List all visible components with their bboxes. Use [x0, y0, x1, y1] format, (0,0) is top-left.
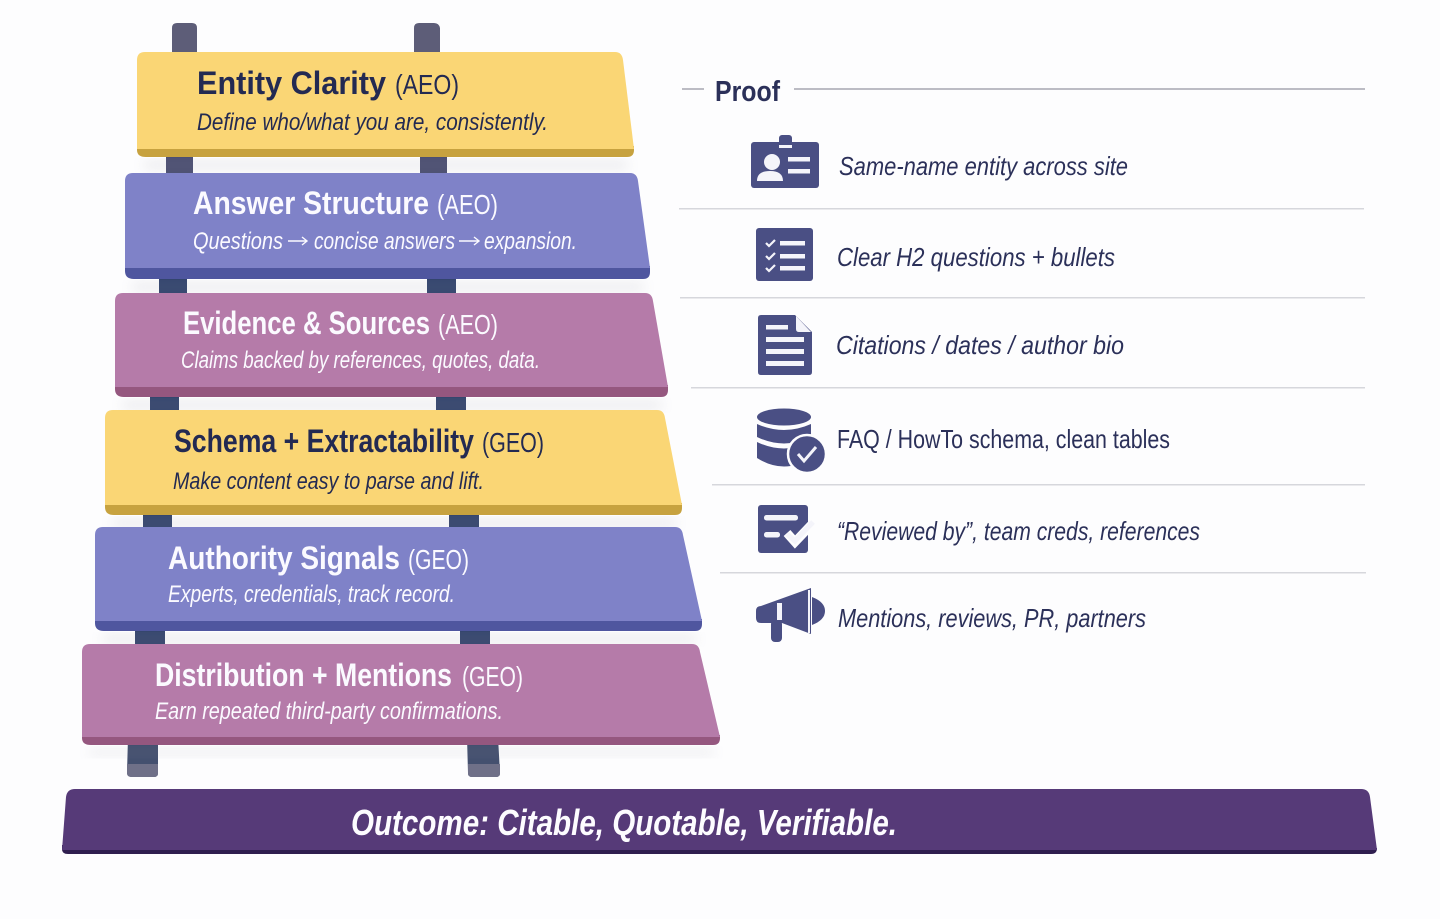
title: Distribution and Mentions: Distribution + Mentions [155, 657, 452, 693]
subtitle with arrows: concise answers [314, 228, 455, 255]
ladder posts [127, 23, 500, 777]
proof item: same-name entity: Same-name entity across site [839, 151, 1128, 181]
title: Answer Structure: Answer Structure [193, 185, 429, 221]
title: Schema and Extractability: Schema + Extractability [174, 423, 474, 459]
plank: Schema and Extractability [105, 410, 682, 528]
title: Entity Clarity: Entity Clarity [197, 65, 386, 101]
icon: database with check [757, 408, 826, 473]
ladder [82, 23, 720, 777]
plank: Evidence and Sources: (AEO) [438, 309, 498, 340]
proof item: clear questions: Clear H2 questions + bullets [837, 242, 1115, 272]
plank: Distribution and Mentions: Earn repeated third-party confirmations. [155, 698, 503, 725]
plank: Evidence and Sources [115, 293, 668, 410]
icon: ID badge [751, 135, 819, 188]
proof item: schema: FAQ / HowTo schema, clean tables [837, 424, 1170, 454]
proof dividers [679, 208, 1366, 574]
icon: checklist [756, 228, 813, 281]
outcome text: Outcome: Citable, Quotable, Verifiable. [351, 802, 897, 843]
title: Evidence and Sources: Evidence & Sources [183, 305, 430, 341]
proof item: citations: Citations / dates / author bio [836, 330, 1124, 360]
proof item: reviewed by: “Reviewed by”, team creds, references [837, 516, 1200, 546]
plank: Schema and Extractability: (GEO) [482, 427, 544, 458]
plank: Distribution and Mentions [82, 644, 720, 756]
outcome banner [62, 789, 1377, 854]
proof heading: Proof [715, 76, 780, 108]
proof panel [679, 76, 1366, 642]
plank: Schema and Extractability: Make content easy to parse and lift. [173, 468, 484, 495]
plank: Answer Structure [125, 173, 650, 292]
plank: Entity Clarity [137, 52, 634, 170]
plank: Evidence and Sources: Claims backed by references, quotes, data. [181, 347, 540, 374]
icon: review form with check [758, 505, 815, 553]
plank: Answer Structure: (AEO) [437, 189, 498, 220]
icon: megaphone [756, 588, 825, 642]
plank: Authority Signals [95, 527, 702, 644]
title: Authority Signals: Authority Signals [168, 540, 400, 576]
subtitle with arrows: Questions [193, 228, 283, 255]
plank: Entity Clarity: Define who/what you are, consistently. [197, 109, 548, 136]
subtitle with arrows: expansion. [484, 228, 577, 255]
icon: document [758, 315, 812, 375]
plank: Distribution and Mentions: (GEO) [462, 661, 523, 692]
plank: Authority Signals: Experts, credentials, track record. [168, 581, 455, 608]
proof item: mentions: Mentions, reviews, PR, partners [838, 603, 1146, 633]
plank: Entity Clarity: (AEO) [395, 69, 459, 100]
plank: Authority Signals: (GEO) [408, 544, 469, 575]
subtitle with arrows [193, 228, 577, 255]
